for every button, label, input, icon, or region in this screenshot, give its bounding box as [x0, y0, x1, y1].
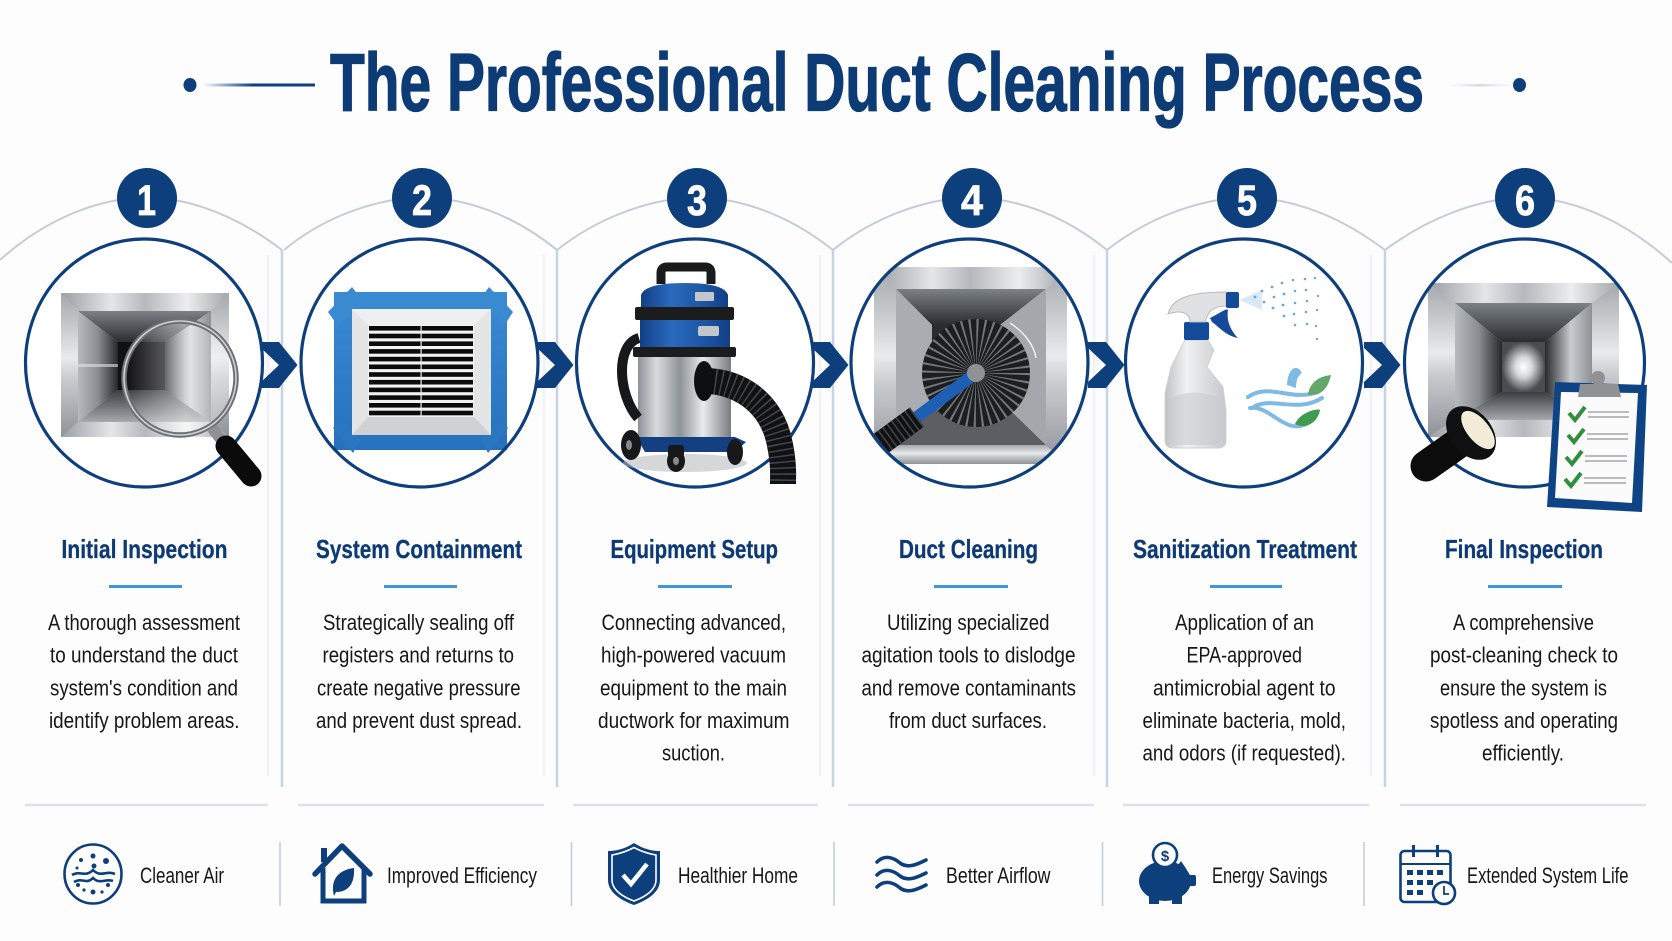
icon: shield check	[608, 843, 660, 905]
description: agitation tools to dislodge	[862, 643, 1076, 668]
heading: System Containment	[316, 534, 522, 564]
icon: house with leaf	[315, 846, 370, 901]
icon: calendar clock	[1400, 845, 1455, 904]
illustration: shop vacuum	[621, 267, 783, 484]
benefits row	[64, 842, 1628, 906]
description: create negative pressure	[317, 675, 520, 700]
image circle 3	[576, 239, 814, 487]
arrow 4	[1088, 342, 1124, 388]
description: efficiently.	[1482, 741, 1564, 766]
panel: step 3 equipment setup	[576, 168, 814, 766]
description: system's condition and	[50, 675, 238, 700]
arrow 2	[537, 342, 574, 388]
description	[598, 610, 790, 766]
panel: step 5 sanitization treatment	[1126, 168, 1362, 766]
description: antimicrobial agent to	[1153, 675, 1336, 700]
heading underline	[934, 585, 1008, 588]
panel: step 1 initial inspection	[26, 168, 262, 733]
icon: cleaner air	[64, 844, 122, 904]
heading underline	[658, 585, 732, 588]
heading: Initial Inspection	[62, 534, 228, 564]
description: suction.	[662, 741, 725, 766]
image circle outline 6	[1404, 239, 1644, 487]
label: healthier home: Healthier Home	[678, 863, 798, 888]
description: post-cleaning check to	[1430, 643, 1618, 668]
icon: magnifying glass	[124, 321, 251, 476]
heading underline	[384, 585, 457, 588]
step number 5: 5	[1237, 177, 1257, 225]
description: to understand the duct	[50, 643, 238, 668]
step number 1	[117, 168, 177, 228]
illustration: spray bottle	[1165, 292, 1239, 448]
step number 1: 1	[137, 177, 156, 225]
description: eliminate bacteria, mold,	[1142, 708, 1346, 733]
label: improved efficiency: Improved Efficiency	[387, 863, 537, 888]
heading underline	[1210, 585, 1282, 588]
image circle outline 4	[851, 239, 1088, 487]
image circle 4	[851, 239, 1088, 487]
step number 4: 4	[961, 177, 983, 225]
icon: airflow waves	[877, 857, 926, 891]
step number 6: 6	[1515, 177, 1535, 225]
description	[862, 610, 1076, 733]
description: Application of an	[1175, 610, 1314, 635]
description: ductwork for maximum	[598, 708, 790, 733]
description	[48, 610, 240, 733]
heading: Sanitization Treatment	[1133, 534, 1357, 564]
panel frames: arches and dividers	[0, 197, 1672, 805]
step number 3	[667, 168, 727, 228]
description: and prevent dust spread.	[316, 708, 522, 733]
description: and odors (if requested).	[1142, 741, 1346, 766]
heading: Duct Cleaning	[899, 534, 1038, 564]
step number 2	[392, 168, 452, 228]
icon: clipboard checklist	[1547, 371, 1647, 512]
description: A thorough assessment	[48, 610, 240, 635]
description	[1142, 610, 1346, 766]
illustration: brush in duct	[874, 267, 1067, 464]
description: registers and returns to	[322, 643, 514, 668]
description: Strategically sealing off	[323, 610, 515, 635]
description	[1430, 610, 1618, 766]
description: A comprehensive	[1453, 610, 1594, 635]
image circle outline 2	[301, 239, 538, 487]
panel: step 6 final inspection	[1404, 168, 1647, 766]
title right ornament	[1447, 78, 1526, 92]
description: Connecting advanced,	[602, 610, 786, 635]
image circle outline 1	[26, 239, 262, 487]
icon: piggy bank: $	[1161, 848, 1170, 865]
description: and remove contaminants	[862, 675, 1076, 700]
description: equipment to the main	[600, 675, 787, 700]
illustration: duct opening	[61, 293, 229, 437]
description: ensure the system is	[1440, 675, 1607, 700]
description: EPA-approved	[1186, 643, 1302, 668]
icon: piggy bank	[1139, 843, 1196, 904]
icon: fresh air waves and leaves	[1248, 368, 1331, 426]
description: identify problem areas.	[49, 708, 240, 733]
image circle 5	[1126, 239, 1362, 487]
image circle 2	[301, 239, 538, 487]
label: cleaner air: Cleaner Air	[140, 863, 224, 888]
image circle outline 3	[576, 239, 814, 487]
illustration: taped grille	[328, 287, 513, 453]
step number 6	[1495, 168, 1555, 228]
heading underline	[109, 585, 182, 588]
panel: step 4 duct cleaning	[851, 168, 1088, 733]
title	[184, 38, 1526, 128]
step number 3: 3	[687, 177, 707, 225]
image circle outline 5	[1126, 239, 1362, 487]
panel: step 2 system containment	[301, 168, 538, 733]
icon: spray mist	[1239, 277, 1319, 340]
image circle 6	[1404, 239, 1644, 487]
heading: Equipment Setup	[610, 534, 778, 564]
step number 2: 2	[412, 177, 432, 225]
label: energy savings: Energy Savings	[1212, 863, 1328, 888]
step number 4	[942, 168, 1002, 228]
icon: flashlight	[1426, 396, 1506, 470]
arrow 5	[1364, 342, 1400, 388]
arrow 1	[261, 342, 298, 388]
heading underline	[1488, 585, 1562, 588]
label: better airflow: Better Airflow	[946, 863, 1051, 888]
icon: rotary brush	[872, 323, 1036, 450]
title left ornament	[184, 78, 315, 92]
description	[316, 610, 522, 733]
arrow 3	[812, 342, 848, 388]
image circle 1	[26, 239, 262, 487]
step number 5	[1217, 168, 1277, 228]
heading: Final Inspection	[1445, 534, 1603, 564]
description: spotless and operating	[1430, 708, 1618, 733]
illustration: clean duct	[1428, 283, 1619, 437]
description: from duct surfaces.	[889, 708, 1047, 733]
description: Utilizing specialized	[887, 610, 1050, 635]
description: high-powered vacuum	[601, 643, 786, 668]
